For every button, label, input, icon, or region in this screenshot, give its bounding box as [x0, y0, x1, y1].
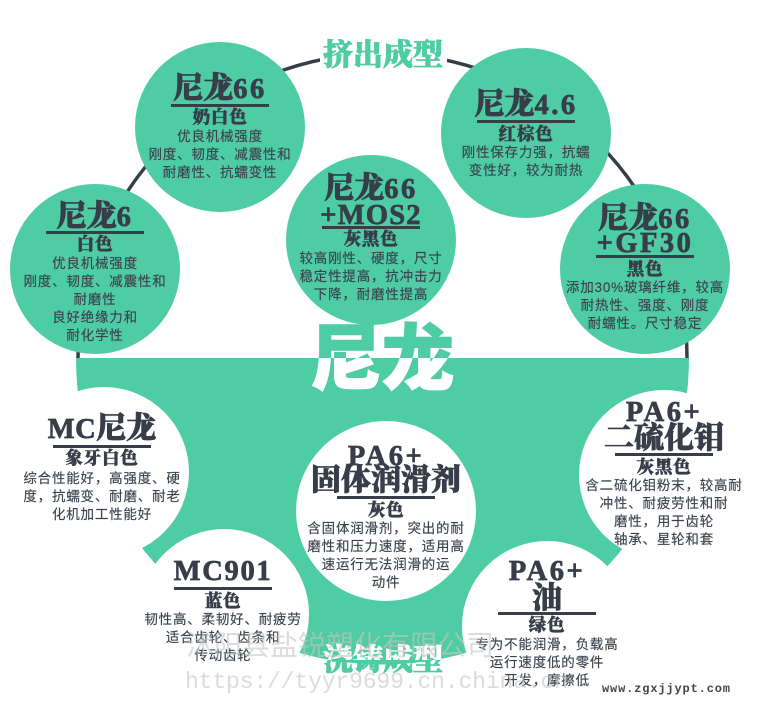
panel: MC901: 传动齿轮: [194, 648, 252, 663]
panel: nylon 4.6: [441, 48, 611, 218]
panel: nylon 66: 尼龙66: [173, 72, 267, 105]
panel: nylon 66: 耐磨性、抗蠕变性: [163, 165, 277, 180]
panel: PA6 + solid lubricant: 含固体润滑剂，突出的耐: [307, 521, 465, 536]
panel: nylon 6: 良好绝缘力和: [52, 310, 138, 325]
panel: PA6 + molybdenum disulfide: 磨性，用于齿轮: [614, 514, 714, 529]
panel: nylon 66 + MOS2: 灰黑色: [344, 229, 398, 249]
panel: nylon 66 + GF30: 耐蠕性。尺寸稳定: [588, 316, 702, 331]
panel: nylon 66 + GF30: 耐热性、强度、刚度: [581, 298, 709, 313]
panel: nylon 4.6: 变性好，较为耐热: [469, 163, 583, 178]
panel: PA6 + molybdenum disulfide: 二硫化钼: [604, 421, 724, 455]
panel: nylon 66 + GF30: 添加30%玻璃纤维，较高: [566, 279, 724, 295]
panel: nylon 6: [10, 184, 180, 354]
lower half disk: [76, 358, 689, 664]
panel: nylon 6: 耐化学性: [66, 328, 124, 343]
panel: PA6 + solid lubricant: 动件: [372, 575, 400, 590]
heading: casting moulding: 浇铸成型: [323, 644, 443, 677]
panel: nylon 66 + GF30: [560, 184, 730, 354]
panel: nylon 4.6: 刚性保存力强，抗蠕: [462, 145, 590, 160]
heading: casting moulding: 浇铸成型: [323, 644, 443, 677]
panel: nylon 6: 耐磨性: [74, 292, 116, 307]
panel: PA6 + solid lubricant: PA6+: [348, 441, 424, 472]
panel: PA6 + oil: 绿色: [529, 615, 565, 635]
panel: nylon 66: 奶白色: [193, 107, 247, 127]
watermark: url: https://tyyr9699.cn.china.cn: [185, 669, 568, 695]
ring connecting extrusion grades: [78, 54, 687, 358]
panel: MC nylon: 化机加工性能好: [52, 507, 152, 522]
panel: PA6 + oil: 运行速度低的零件: [490, 655, 604, 670]
panel: MC901: 蓝色: [205, 591, 241, 611]
panel: nylon 6: 优良机械强度: [52, 256, 138, 271]
panel: PA6 + oil: 油: [532, 582, 562, 615]
watermark: company name: 沭阳县盐锐塑化有限公司: [186, 630, 494, 661]
panel: MC901: 韧性高、柔韧好、耐疲劳: [144, 611, 302, 627]
panel: PA6 + molybdenum disulfide: 冲性、耐疲劳性和耐: [600, 495, 728, 511]
panel: nylon 6: 尼龙6: [57, 200, 133, 233]
panel: nylon 66: 刚度、韧度、减震性和: [148, 147, 292, 162]
panel: PA6 + solid lubricant: 磨性和压力速度，适用高: [307, 538, 465, 554]
panel: nylon 66 + MOS2: 较高刚性、硬度，尺寸: [300, 250, 442, 266]
panel: nylon 6: 白色: [77, 234, 113, 254]
panel: PA6 + molybdenum disulfide: 轴承、星轮和套: [614, 532, 714, 547]
site url: www.zgxjjypt.com: [602, 682, 730, 696]
panel: nylon 66 + GF30: +GF30: [597, 228, 693, 259]
panel: MC901: MC901: [174, 556, 272, 587]
panel: MC nylon: 度，抗蠕变、耐磨、耐老: [23, 489, 181, 504]
panel: nylon 6: 刚度、韧度、减震性和: [24, 274, 166, 289]
panel: MC nylon: [19, 387, 189, 557]
panel: nylon 4.6: 红棕色: [499, 124, 553, 144]
panel: PA6 + oil: 专为不能润滑，负载高: [476, 636, 618, 652]
title: nylon: 尼龙: [310, 320, 454, 400]
panel: nylon 66 + MOS2: [286, 155, 456, 325]
panel: PA6 + molybdenum disulfide: [579, 390, 749, 560]
panel: PA6 + molybdenum disulfide: 灰黑色: [637, 457, 691, 477]
panel: nylon 66 + GF30: 黑色: [627, 259, 663, 279]
panel: MC nylon: MC尼龙: [48, 412, 156, 445]
panel: PA6 + molybdenum disulfide: PA6+: [626, 397, 702, 428]
panel: MC nylon: 象牙白色: [65, 448, 139, 468]
panel: MC901: [139, 529, 309, 699]
panel: PA6 + solid lubricant: 速运行无法润滑的运: [322, 557, 450, 572]
panel: PA6 + solid lubricant: [296, 421, 476, 601]
panel: nylon 66 + GF30: 尼龙66: [598, 202, 692, 235]
panel: nylon 66 + MOS2: +MOS2: [320, 200, 422, 231]
panel: nylon 66: 优良机械强度: [177, 129, 263, 144]
title: nylon: 尼龙: [310, 320, 454, 400]
panel: PA6 + molybdenum disulfide: 含二硫化钼粉末，较高耐: [585, 477, 743, 493]
panel: nylon 66 + MOS2: 下降，耐磨性提高: [314, 286, 428, 302]
panel: nylon 4.6: 尼龙4.6: [474, 88, 578, 121]
panel: PA6 + oil: PA6+: [509, 556, 585, 587]
panel: PA6 + oil: [462, 541, 632, 710]
panel: MC nylon: 综合性能好，高强度、硬: [23, 470, 181, 486]
panel: PA6 + solid lubricant: 灰色: [368, 500, 404, 520]
panel: PA6 + oil: 开发，摩擦低: [504, 672, 590, 688]
panel: nylon 66 + MOS2: 稳定性提高，抗冲击力: [300, 268, 442, 284]
panel: nylon 66 + MOS2: 尼龙66: [324, 172, 418, 205]
panel: nylon 66: [135, 42, 305, 212]
panel: PA6 + solid lubricant: 固体润滑剂: [311, 464, 461, 497]
heading: extrusion moulding: 挤出成型: [323, 39, 443, 72]
panel: MC901: 适合齿轮、齿条和: [166, 629, 280, 645]
